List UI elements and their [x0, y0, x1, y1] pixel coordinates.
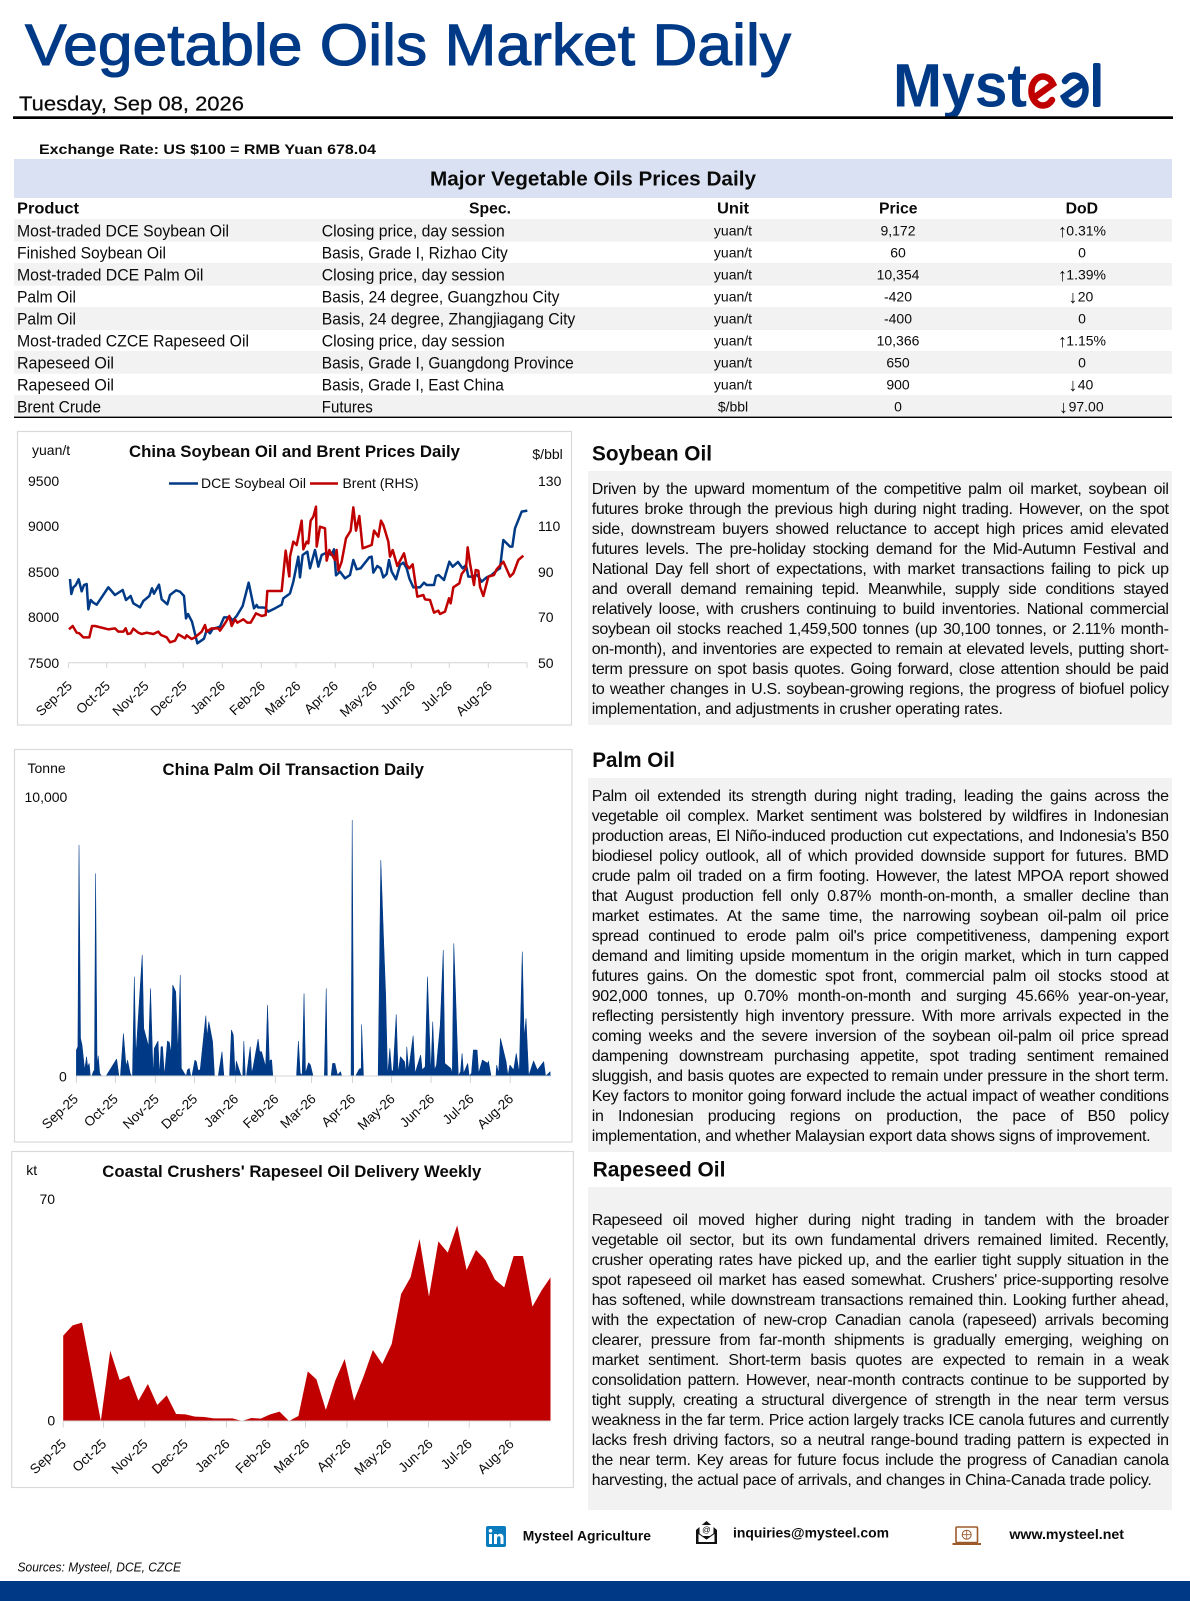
- left unit: yuan/t: [32, 442, 70, 458]
- panel: Rapeseed Oil commentary: the near term. Key areas for future focus include the progress of Canadian canola: [592, 1452, 1169, 1468]
- table price column: 650: [886, 354, 910, 370]
- table product column: [17, 222, 249, 416]
- x axis labels: May-26: [351, 1436, 394, 1478]
- panel: Soybean Oil commentary: relatively loose, with crushers continuing to build inventories. National commercial: [592, 600, 1169, 618]
- table day-on-day column: ↑: [1058, 221, 1067, 241]
- right unit: $/bbl: [532, 446, 563, 462]
- x axis ticks: [76, 1076, 550, 1083]
- x axis labels: Apr-26: [318, 1091, 358, 1130]
- table price column: [877, 222, 920, 414]
- right axis labels: 90: [538, 564, 554, 580]
- chart: China Soybean Oil and Brent Prices Daily: [18, 432, 572, 725]
- table unit column: yuan/t: [714, 288, 752, 304]
- table header row: Product: [17, 200, 80, 217]
- table day-on-day column: 0.31%: [1066, 222, 1106, 238]
- table unit column: $/bbl: [718, 398, 748, 414]
- chart title: Coastal Crushers' Rapeseel Oil Delivery Weekly: [102, 1163, 482, 1181]
- heading: Palm Oil: Palm Oil: [592, 749, 675, 772]
- exchange rate: Exchange Rate: US $100 = RMB Yuan 678.04: [39, 141, 376, 157]
- panel: Palm Oil commentary: reflecting persistently high inventory pressure. With more arrivals expected in the: [592, 1008, 1169, 1025]
- left axis labels: 9000: [28, 518, 59, 534]
- y axis labels: 0: [47, 1413, 55, 1429]
- panel: Rapeseed Oil commentary: consolidation pattern. However, near-month contracts continue to be supported by: [592, 1372, 1169, 1388]
- logo: Mysteel: Myst: [893, 52, 1027, 120]
- x axis labels: [33, 678, 495, 720]
- panel: Soybean Oil commentary: term pressure on spot basis quotes. Going forward, close attention should be paid: [592, 660, 1169, 678]
- right axis labels: 70: [538, 609, 554, 625]
- table day-on-day column: ↓: [1068, 375, 1078, 395]
- x axis labels: Nov-25: [110, 678, 152, 719]
- area: transaction volume: [76, 820, 550, 1076]
- table price column: 0: [894, 398, 902, 414]
- x axis labels: Oct-25: [73, 678, 113, 717]
- x axis labels: Nov-25: [120, 1091, 162, 1132]
- panel: Palm Oil commentary: crude palm oil traded on a firm footing. However, the latest MPOA report showed: [592, 868, 1169, 885]
- table price column: -420: [884, 288, 912, 304]
- x axis labels: [27, 1436, 517, 1478]
- table day-on-day column: 1.39%: [1066, 266, 1106, 282]
- table spec column: Basis, Grade I, Guangdong Province: [322, 354, 574, 372]
- x axis labels: Oct-25: [81, 1091, 121, 1130]
- panel: Soybean Oil commentary: soybean oil stocks reached 1,459,500 tonnes (up 30,100 tonnes, or 2.11% month-: [592, 620, 1169, 638]
- table unit column: yuan/t: [714, 244, 752, 260]
- table day-on-day column: [1058, 221, 1106, 417]
- y axis labels: 0: [59, 1069, 67, 1085]
- legend: Brent (RHS): [342, 475, 418, 491]
- left axis labels: 8500: [28, 564, 59, 580]
- panel: Soybean Oil commentary: implementation, and adjustments in crusher operating rates.: [592, 700, 1003, 718]
- panel: Palm Oil commentary: market estimates. At the same time, the narrowing soybean oil-palm oil price: [592, 908, 1169, 925]
- panel: Palm Oil commentary: sluggish, and basis quotes are expected to remain under pressure in the short term.: [592, 1068, 1169, 1085]
- table product column: Palm Oil: [17, 288, 76, 306]
- panel: Soybean Oil commentary: National Day fell short of expectations, with market transactions failing to pick up: [592, 560, 1169, 578]
- icon: email: [696, 1521, 717, 1544]
- left axis labels: 9500: [28, 473, 59, 489]
- table unit column: yuan/t: [714, 332, 752, 348]
- table spec column: [322, 222, 576, 416]
- panel: Soybean Oil commentary: futures levels. The pre-holiday stocking demand for the Mid-Autumn Festival and: [592, 540, 1169, 558]
- x axis labels: Mar-26: [262, 678, 304, 718]
- icon: website laptop: [952, 1527, 981, 1545]
- panel: Rapeseed Oil commentary: crusher operating rates have picked up, and the earlier tight supply situation in the: [592, 1252, 1169, 1268]
- panel: Soybean Oil commentary: futures broke through the previous high during night trading. However, on the spot: [592, 500, 1169, 518]
- heading: Soybean Oil: Soybean Oil: [592, 443, 712, 466]
- right axis labels: 110: [538, 518, 561, 534]
- line: Brent crude: [69, 507, 523, 642]
- unit: Tonne: [28, 760, 66, 776]
- line: DCE soybean oil: [70, 511, 527, 643]
- heading: Rapeseed Oil: Rapeseed Oil: [593, 1159, 725, 1182]
- y axis labels: [24, 789, 68, 1085]
- panel: Palm Oil commentary: futures gains. On the domestic spot front, commercial palm oil stocks stood at: [592, 968, 1169, 985]
- icon: email: @: [702, 1524, 711, 1534]
- table product column: Rapeseed Oil: [17, 376, 114, 394]
- x axis labels: May-26: [337, 678, 380, 720]
- legend: [169, 475, 418, 491]
- x axis labels: Jan-26: [188, 678, 228, 717]
- x axis labels: Sep-25: [27, 1436, 69, 1477]
- table unit column: yuan/t: [714, 222, 752, 238]
- x axis labels: Feb-26: [233, 1436, 274, 1476]
- footer bar: [0, 1581, 1190, 1601]
- table spec column: Basis, Grade I, East China: [322, 376, 505, 394]
- table spec column: Futures: [322, 398, 373, 416]
- table price column: 9,172: [880, 222, 916, 238]
- table day-on-day column: ↓: [1059, 397, 1068, 417]
- panel: Palm Oil commentary: in Indonesian producing regions on production, the pace of B50 policy: [592, 1108, 1169, 1125]
- legend: DCE Soybeal Oil: [201, 475, 306, 491]
- panel: Palm Oil commentary: dampening downstream purchasing appetite, spot trading sentiment remained: [592, 1048, 1169, 1065]
- panel: Rapeseed Oil commentary: vegetable oil sector, but its own fundamental drivers remained limited. Recently,: [592, 1232, 1169, 1248]
- unit: kt: [26, 1162, 37, 1178]
- panel: Soybean Oil commentary: side, downstream buyers showed reluctance to accept high prices amid elevated: [592, 520, 1169, 538]
- panel: Palm Oil commentary: that August production fell only 0.87% month-on-month, a smaller decline than: [592, 888, 1169, 905]
- panel: Soybean Oil commentary: Driven by the upward momentum of the competitive palm oil market, soybean oil: [592, 480, 1169, 498]
- table price column: -400: [884, 310, 912, 326]
- table day-on-day column: 0: [1078, 310, 1086, 326]
- table day-on-day column: 1.15%: [1066, 332, 1106, 348]
- panel: Rapeseed Oil commentary: Rapeseed oil moved higher during night trading in tandem with the broader: [592, 1212, 1169, 1228]
- table spec column: Basis, 24 degree, Zhangjiagang City: [322, 310, 576, 328]
- y axis labels: 70: [40, 1191, 55, 1207]
- y axis labels: [40, 1191, 55, 1429]
- table heading band: [14, 159, 1172, 198]
- panel: Palm Oil commentary: production areas, El Niño-induced production cut expectations, and Indonesia's B50: [592, 828, 1169, 845]
- table day-on-day column: ↑: [1058, 265, 1067, 285]
- panel: Palm Oil commentary: implementation, and whether Malaysian export data shows signs of improvement.: [592, 1128, 1150, 1145]
- panel: Rapeseed Oil commentary: with the expectation of new-crop Canadian canola (rapeseed) arrivals becoming: [592, 1312, 1169, 1328]
- table spec column: Basis, Grade I, Rizhao City: [322, 244, 508, 262]
- table header row: DoD: [1066, 200, 1098, 217]
- panel: Rapeseed Oil commentary: tight supply, creating a structural divergence of strength in the near term versus: [592, 1392, 1169, 1408]
- x axis labels: Nov-25: [109, 1436, 151, 1477]
- price table: [14, 159, 1172, 418]
- table product column: Most-traded DCE Palm Oil: [17, 266, 203, 284]
- x axis labels: May-26: [355, 1091, 398, 1133]
- panel: Rapeseed Oil commentary: harvesting, the actual pace of arrivals, and changes in China-Canada trade policy.: [592, 1472, 1152, 1488]
- area: weekly delivery: [63, 1225, 550, 1421]
- table product column: Finished Soybean Oil: [17, 244, 166, 262]
- x axis labels: [39, 1091, 516, 1133]
- x axis labels: Aug-26: [475, 1436, 517, 1477]
- table day-on-day column: ↓: [1068, 287, 1078, 307]
- panel: Palm Oil commentary: vegetable oil complex. Market sentiment was bolstered by wildfires in Indonesian: [592, 808, 1169, 825]
- table unit column: yuan/t: [714, 266, 752, 282]
- table price column: 900: [886, 376, 910, 392]
- panel: Rapeseed Oil commentary: lacks fresh driving factors, so a neutral range-bound trading pattern is expected in: [592, 1432, 1169, 1448]
- x axis ticks: [63, 1421, 550, 1428]
- right axis labels: 50: [538, 655, 554, 671]
- panel: Palm Oil commentary: biodiesel policy outlook, all of which provided downside support for futures. BMD: [592, 848, 1169, 865]
- table header row: Price: [879, 200, 918, 217]
- x axis labels: Oct-25: [69, 1436, 109, 1475]
- table spec column: Basis, 24 degree, Guangzhou City: [322, 288, 560, 306]
- panel: Rapeseed Oil commentary: weakness in the far term. Price action largely tracks ICE canola futures and currently: [592, 1412, 1169, 1428]
- panel: Palm Oil commentary: 902,000 tonnes, up 0.70% month-on-month and surging 45.66% year-on-year,: [592, 988, 1169, 1005]
- x axis labels: Jul-26: [438, 1436, 475, 1472]
- left axis labels: 8000: [28, 609, 59, 625]
- table product column: Brent Crude: [17, 398, 101, 416]
- panel: Rapeseed Oil commentary: clearer, pressure from far-month shipments is gradually emerging, weighing on: [592, 1332, 1169, 1348]
- table header row: Spec.: [469, 200, 511, 217]
- table unit column: yuan/t: [714, 376, 752, 392]
- contact: Mysteel Agriculture: Mysteel Agriculture: [523, 1528, 651, 1544]
- x axis labels: Dec-25: [149, 1436, 191, 1477]
- x axis labels: Apr-26: [314, 1436, 354, 1475]
- table spec column: Closing price, day session: [322, 332, 505, 350]
- table price column: 10,354: [877, 266, 920, 282]
- panel: Palm Oil commentary: Palm oil extended its strength during night trading, leading the gains across the: [592, 788, 1169, 805]
- table day-on-day column: 20: [1078, 288, 1093, 304]
- x axis labels: Feb-26: [240, 1091, 282, 1131]
- panel: Rapeseed Oil commentary: market sentiment. Short-term basis quotes are expected to remain in a weak: [592, 1352, 1169, 1368]
- panel: Soybean Oil commentary: on-month), and inventories are expected to remain at elevated levels, putting short-: [592, 640, 1169, 658]
- x axis labels: Jun-26: [395, 1436, 436, 1475]
- x axis labels: Apr-26: [301, 678, 341, 717]
- x axis labels: Sep-25: [33, 678, 75, 719]
- panel: Palm Oil commentary: coming weeks and the severe inversion of the soybean oil-palm oil price spread: [592, 1028, 1169, 1045]
- panel: Soybean Oil commentary: to weather changes in U.S. soybean-growing regions, the progress of biofuel policy: [592, 680, 1169, 698]
- table price column: 10,366: [877, 332, 920, 348]
- panel: Soybean Oil commentary: and overall demand remaining tepid. Meanwhile, supply side conditions stayed: [592, 580, 1169, 598]
- x axis labels: Aug-26: [453, 678, 495, 719]
- sources note: Sources: Mysteel, DCE, CZCE: [18, 1560, 181, 1575]
- x axis labels: Sep-25: [39, 1091, 81, 1132]
- right axis labels: 130: [538, 473, 562, 489]
- x axis labels: Jan-26: [192, 1436, 233, 1475]
- left axis labels: [28, 473, 59, 671]
- icon: LinkedIn: [486, 1526, 506, 1547]
- table day-on-day column: ↑: [1058, 331, 1067, 351]
- chart title: China Palm Oil Transaction Daily: [162, 761, 425, 779]
- table day-on-day column: 0: [1078, 354, 1086, 370]
- table product column: Rapeseed Oil: [17, 354, 114, 372]
- x axis labels: Jun-26: [397, 1091, 437, 1130]
- table product column: Most-traded DCE Soybean Oil: [17, 222, 229, 240]
- table product column: Most-traded CZCE Rapeseed Oil: [17, 332, 249, 350]
- panel: Rapeseed Oil commentary: spot rapeseed oil market has eased somewhat. Crushers' price-supporting resolve: [592, 1272, 1169, 1288]
- date: Tuesday, Sep 08, 2026: [19, 94, 244, 116]
- table product column: Palm Oil: [17, 310, 76, 328]
- panel: Rapeseed Oil commentary: [588, 1187, 1172, 1510]
- x axis labels: Dec-25: [148, 678, 190, 719]
- x axis labels: Jul-26: [440, 1091, 477, 1127]
- contact: email address: inquiries@mysteel.com: [733, 1525, 889, 1541]
- table heading band: Major Vegetable Oils Prices Daily: [430, 168, 757, 190]
- table header row: Unit: [717, 200, 750, 217]
- table spec column: Closing price, day session: [322, 266, 505, 284]
- chart: China Palm Oil Transaction Daily: [14, 750, 572, 1142]
- panel: Palm Oil commentary: demand and limiting upside momentum in the origin market, which in turn capped: [592, 948, 1169, 965]
- table spec column: Closing price, day session: [322, 222, 505, 240]
- table day-on-day column: 40: [1078, 376, 1093, 392]
- logo: Mysteel: [893, 52, 1100, 120]
- chart title: China Soybean Oil and Brent Prices Daily: [129, 443, 461, 461]
- panel: Palm Oil commentary: spread continued to erode palm oil's price competitiveness, dampening export: [592, 928, 1169, 945]
- x axis ticks: [68, 663, 527, 668]
- right axis labels: [538, 473, 562, 671]
- chart: Coastal Crushers' Rapeseel Oil Delivery Weekly: [12, 1152, 573, 1488]
- contact: website: www.mysteel.net: [1008, 1526, 1124, 1542]
- table day-on-day column: 0: [1078, 244, 1086, 260]
- x axis labels: Mar-26: [277, 1091, 319, 1131]
- x axis labels: Mar-26: [271, 1436, 312, 1476]
- x axis labels: Jul-26: [418, 678, 455, 714]
- x axis labels: Aug-26: [474, 1091, 516, 1132]
- table price column: 60: [890, 244, 906, 260]
- x axis labels: Feb-26: [227, 678, 268, 718]
- panel: Rapeseed Oil commentary: has softened, while downstream transactions remained thin. Looking further ahead,: [592, 1292, 1169, 1308]
- panel: Palm Oil commentary: [588, 778, 1172, 1152]
- x axis labels: Dec-25: [158, 1091, 200, 1132]
- table day-on-day column: 97.00: [1069, 398, 1104, 414]
- table header row: [17, 200, 1098, 217]
- panel: Soybean Oil commentary: [588, 471, 1172, 725]
- panel: Palm Oil commentary: Key factors to monitor going forward include the actual impact of weather conditions: [592, 1088, 1169, 1105]
- x axis labels: Jun-26: [378, 678, 418, 717]
- title: Vegetable Oils Market Daily: [25, 13, 791, 78]
- left axis labels: 7500: [28, 655, 59, 671]
- table unit column: [714, 222, 752, 414]
- y axis labels: 10,000: [24, 789, 68, 805]
- table unit column: yuan/t: [714, 354, 752, 370]
- table unit column: yuan/t: [714, 310, 752, 326]
- x axis labels: Jan-26: [201, 1091, 241, 1130]
